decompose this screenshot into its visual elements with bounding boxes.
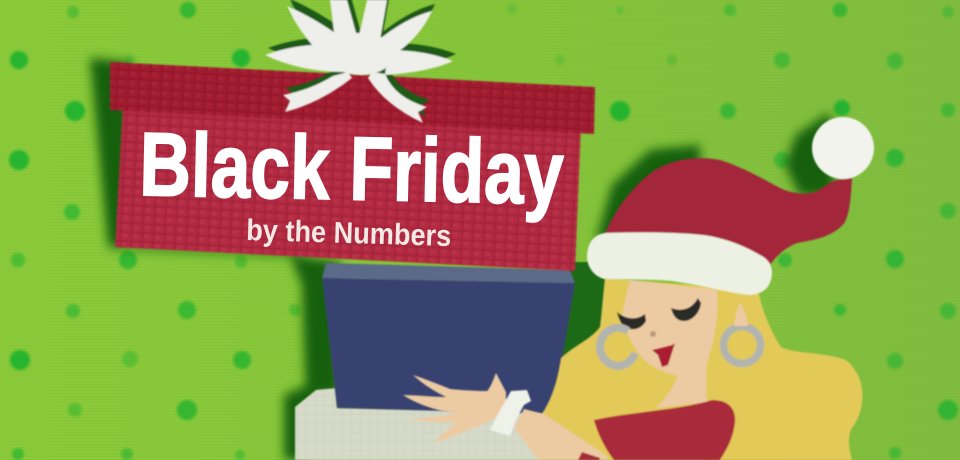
hat fur trim xyxy=(587,232,772,295)
subtitle: by the Numbers: by the Numbers xyxy=(246,214,452,253)
red box lid xyxy=(110,62,595,134)
lips xyxy=(652,343,675,367)
icon: white gift bow xyxy=(265,0,456,123)
nose xyxy=(650,331,656,337)
right eyelashes xyxy=(671,298,701,321)
arm xyxy=(514,409,607,460)
white wrist cuff xyxy=(490,390,531,436)
hat body xyxy=(603,158,852,265)
bow petals xyxy=(265,0,453,123)
bow shadow xyxy=(268,0,456,116)
shadow between navy box and hair xyxy=(556,262,612,364)
navy box top band xyxy=(322,263,575,283)
ear hook xyxy=(734,302,748,326)
icon: Santa hat xyxy=(587,117,874,295)
small sleeve piece xyxy=(578,452,600,460)
character: woman in a Santa hat xyxy=(403,278,863,460)
bottom gift box: cream linen xyxy=(295,388,540,460)
face and neck xyxy=(622,280,717,408)
title: Black Friday: Black Friday xyxy=(139,115,565,224)
dress xyxy=(594,400,735,460)
hat pompom xyxy=(812,117,874,179)
hair xyxy=(540,278,863,460)
navy box front xyxy=(322,278,575,414)
hand with fingers xyxy=(403,373,506,443)
middle gift box: navy xyxy=(322,263,575,414)
left eyelashes xyxy=(617,312,646,329)
top gift box: red lid and base xyxy=(110,62,595,271)
right hoop earring xyxy=(724,326,760,364)
drop shadows behind the gift boxes and hat xyxy=(90,58,835,460)
left hoop earring xyxy=(600,328,635,366)
red box base xyxy=(115,104,581,271)
